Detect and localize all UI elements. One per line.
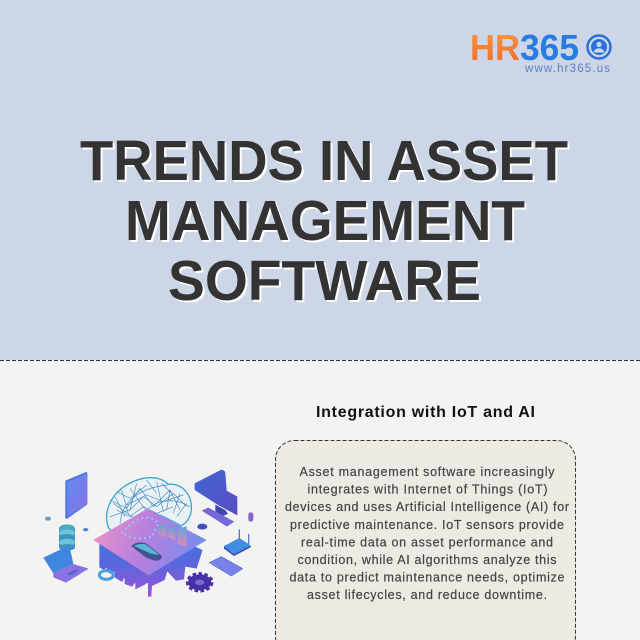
icon: database stack [59,524,75,551]
icon: tablet flat [209,557,243,576]
logo: HR365: 365 [520,27,579,68]
panel: description [276,440,576,640]
chart: platform with bars [93,509,207,597]
title: MANAGEMENT [125,189,525,253]
icon: cylinder [248,512,253,522]
title: MANAGEMENT [127,191,527,255]
logo: HR365: HR [470,27,520,68]
panel: description: real-time data on asset performance and [301,536,553,550]
panel: description: condition, while AI algorithms analyze this [298,553,556,567]
panel: description: asset lifecycles, and reduce downtime. [307,588,547,602]
title [80,129,570,315]
title: TRENDS IN ASSET [80,129,568,193]
icon: brain wireframe [107,478,191,531]
icon: tablet [65,472,87,519]
icon: ring chart [99,571,113,579]
logo: HR365 [470,27,610,75]
icon: small dots [45,517,207,531]
title: SOFTWARE [168,249,481,313]
panel: description: Asset management software increasingly [300,465,555,479]
section heading: Integration with IoT and AI [316,404,535,421]
panel: description: devices and uses Artificial Intelligence (AI) for [285,500,569,514]
panel: description: integrates with Internet of Things (IoT) [308,482,548,496]
title: SOFTWARE [170,251,483,315]
section divider [0,360,640,362]
panel: description: predictive maintenance. IoT sensors provide [290,518,564,532]
title: TRENDS IN ASSET [82,131,570,195]
illustration: IoT and AI isometric scene [43,470,253,597]
logo: HR365: www.hr365.us [524,63,610,75]
icon: gear [188,574,211,590]
icon: laptop [43,545,89,583]
header background [0,0,640,360]
panel: description: data to predict maintenance needs, optimize [290,570,565,584]
icon: monitor [195,470,237,527]
icon: router [224,529,251,556]
